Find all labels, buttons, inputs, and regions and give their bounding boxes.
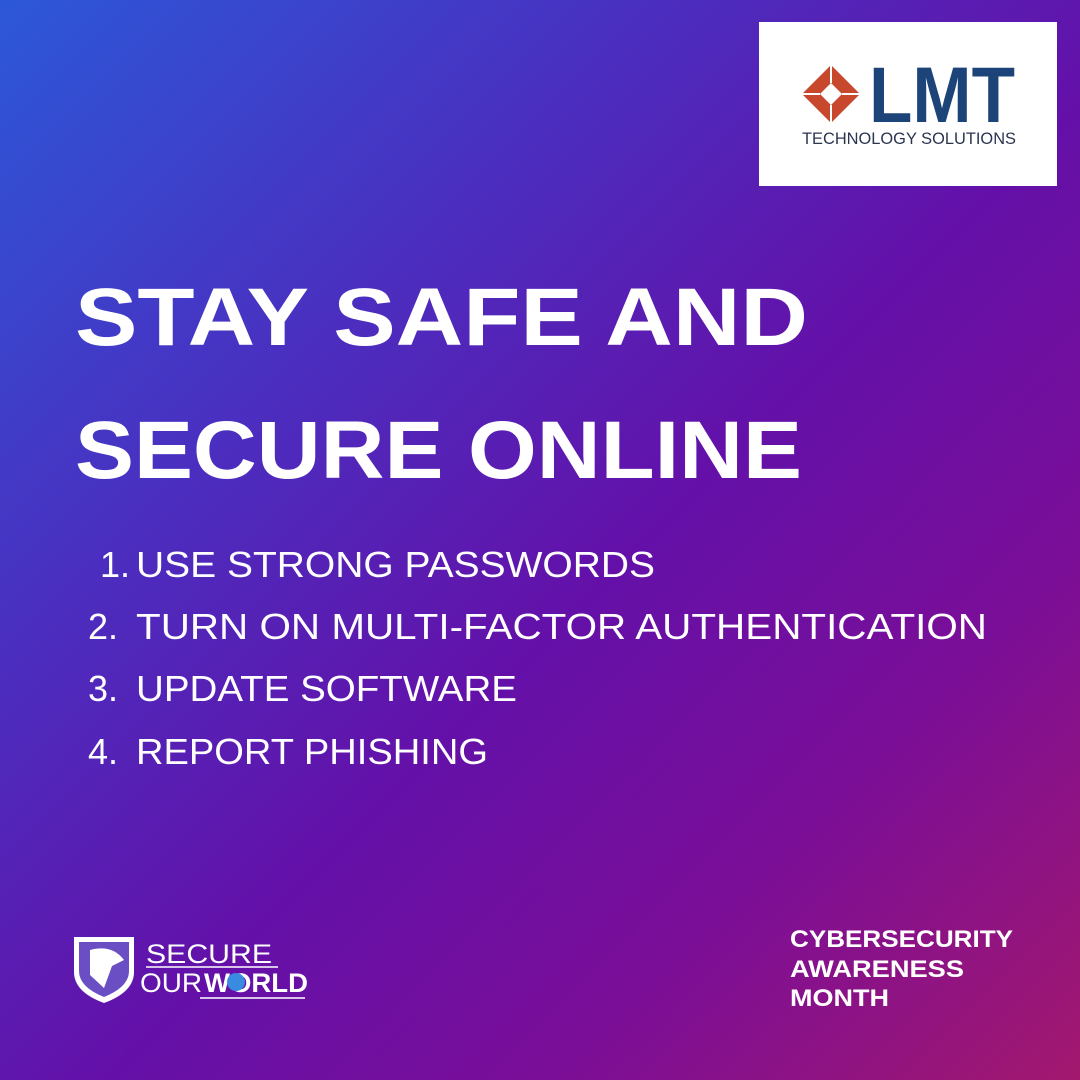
logo: Secure Our World <box>74 937 308 1003</box>
logo: Secure Our World: OUR <box>140 968 202 998</box>
logo box: LMT: LMT <box>869 50 1015 139</box>
list of tips: 4. <box>88 731 118 772</box>
logo box: LMT <box>759 22 1057 186</box>
list of tips: UPDATE SOFTWARE <box>136 668 517 709</box>
icon: shield <box>74 937 134 1003</box>
list of tips: REPORT PHISHING <box>136 731 488 772</box>
title: SECURE ONLINE <box>75 405 802 496</box>
Cybersecurity Awareness Month text: MONTH <box>790 985 889 1012</box>
list of tips <box>88 544 987 772</box>
list of tips: 2. <box>88 606 118 647</box>
list of tips: TURN ON MULTI-FACTOR AUTHENTICATION <box>136 606 987 647</box>
title <box>75 272 808 496</box>
title: STAY SAFE AND <box>75 272 808 363</box>
Cybersecurity Awareness Month text <box>790 926 1013 1012</box>
logo: Secure Our World: WORLD <box>204 968 308 998</box>
list of tips: USE STRONG PASSWORDS <box>136 544 655 585</box>
logo: Secure Our World: SECURE <box>146 939 272 969</box>
Cybersecurity Awareness Month text: CYBERSECURITY <box>790 926 1013 953</box>
list of tips: 3. <box>88 668 118 709</box>
list of tips: 1. <box>100 544 130 585</box>
icon: diamond <box>802 65 860 123</box>
logo box: LMT: TECHNOLOGY SOLUTIONS <box>802 129 1016 148</box>
Cybersecurity Awareness Month text: AWARENESS <box>790 956 964 983</box>
